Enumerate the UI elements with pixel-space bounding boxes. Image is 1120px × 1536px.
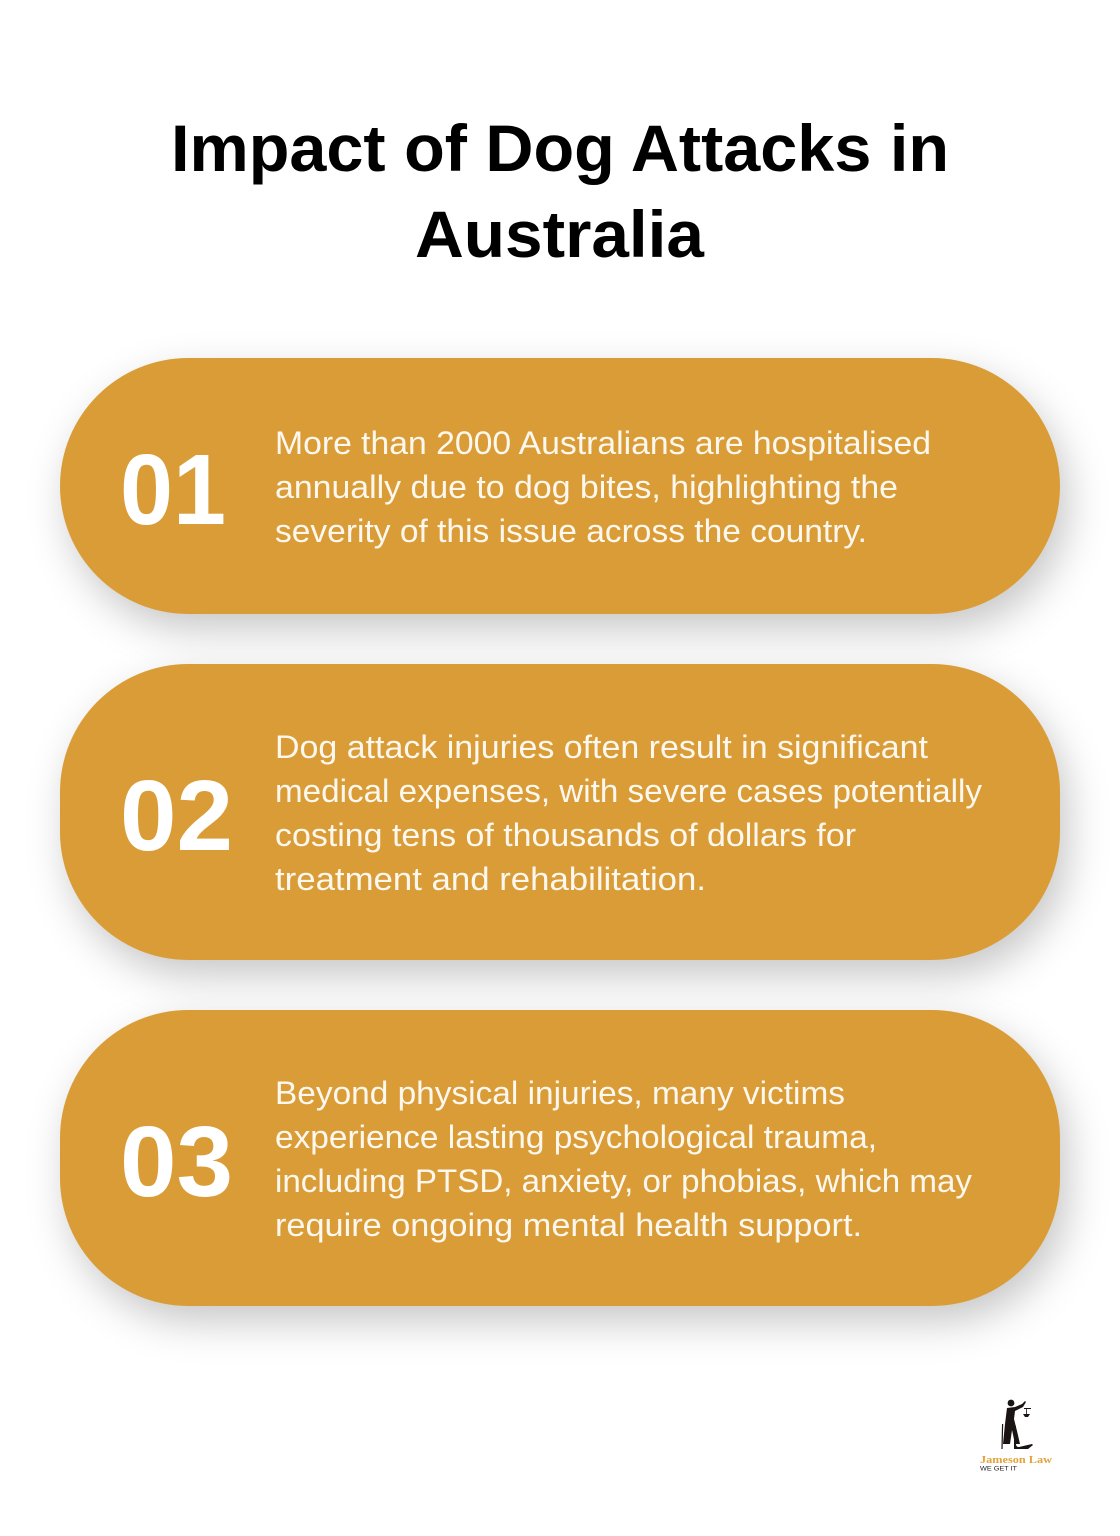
number 03: 03: [120, 1106, 233, 1218]
panel: card 01: [60, 358, 1060, 614]
title: Australia: [415, 197, 705, 271]
title: Impact of Dog Attacks in: [171, 111, 949, 185]
text: card 02 body: costing tens of thousands of dollars for: [275, 817, 856, 853]
text: card 02 body: medical expenses, with severe cases potentially: [275, 773, 983, 809]
text: card 01 body: severity of this issue across the country.: [275, 513, 867, 549]
title: [171, 111, 949, 271]
panel: card 02: [60, 664, 1060, 960]
text: card 03 body: [275, 1075, 973, 1243]
number 01: 01: [120, 434, 226, 546]
text: card 03 body: including PTSD, anxiety, or phobias, which may: [275, 1163, 973, 1199]
logo: Jameson Law: [980, 1400, 1052, 1472]
icon: lady justice figure: [1001, 1400, 1033, 1449]
logo wordmark: Jameson Law: [980, 1455, 1052, 1466]
text: card 02 body: treatment and rehabilitation.: [275, 861, 706, 897]
card 03 background: [60, 1010, 1060, 1306]
number 02: 02: [120, 760, 233, 872]
logo tagline: WE GET IT: [980, 1466, 1017, 1472]
panel: card 03: [60, 1010, 1060, 1306]
card 02 background: [60, 664, 1060, 960]
text: card 02 body: Dog attack injuries often result in significant: [275, 729, 928, 765]
text: card 03 body: Beyond physical injuries, many victims: [275, 1075, 845, 1111]
text: card 02 body: [275, 729, 983, 897]
text: card 03 body: require ongoing mental health support.: [275, 1207, 862, 1243]
text: card 01 body: [275, 425, 931, 549]
text: card 03 body: experience lasting psychological trauma,: [275, 1119, 877, 1155]
card 01 background: [60, 358, 1060, 614]
text: card 01 body: annually due to dog bites, highlighting the: [275, 469, 898, 505]
text: card 01 body: More than 2000 Australians are hospitalised: [275, 425, 931, 461]
